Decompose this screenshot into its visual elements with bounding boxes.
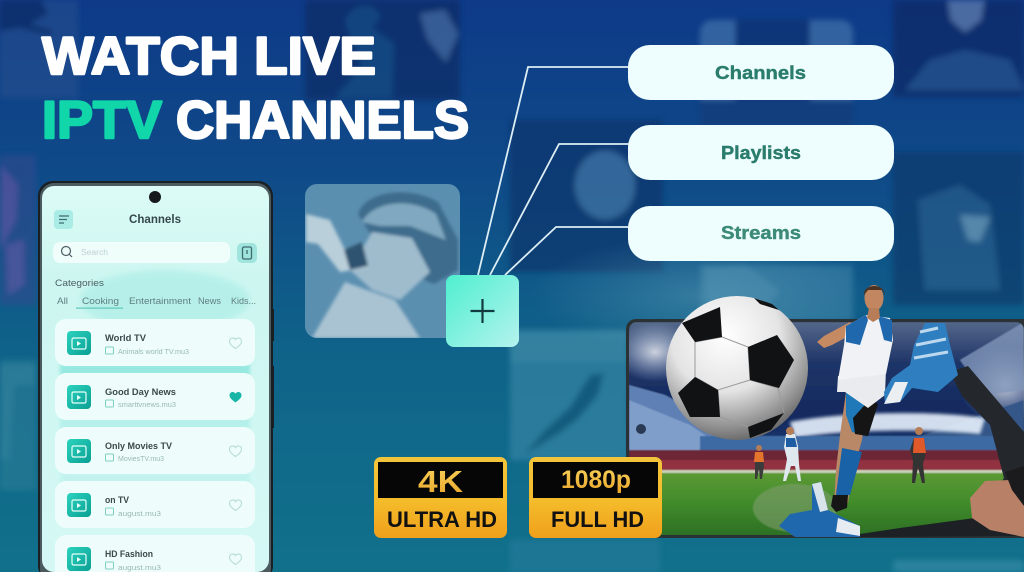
channel card: HD Fashion: august.mu3 (118, 563, 161, 572)
face (970, 480, 1024, 537)
channel card: HD Fashion (55, 535, 255, 572)
channel card: Good Day News (55, 373, 255, 420)
pill: Channels: Channels (715, 63, 806, 83)
screen title: Channels (129, 214, 181, 226)
footballer (817, 285, 893, 512)
channel card: Good Day News: Good Day News (105, 387, 176, 398)
pill: Streams: Streams (721, 223, 801, 243)
title (42, 27, 469, 150)
categories heading: Categories (55, 278, 104, 289)
title line 2: CHANNELS (176, 91, 469, 150)
landscape phone with stadium (613, 319, 1024, 538)
upper glove (884, 323, 958, 404)
category tabs (57, 296, 256, 309)
lower glove (779, 482, 860, 537)
channel card: on TV (55, 481, 255, 528)
category tabs: Entertainment (129, 296, 191, 307)
channel card: World TV (55, 319, 255, 366)
channel card: Only Movies TV: Only Movies TV (105, 441, 173, 452)
ball patches (678, 298, 794, 438)
pill: Playlists (628, 125, 894, 180)
stadium background (613, 322, 1024, 537)
category tabs: News (198, 296, 221, 307)
pill: Channels (628, 45, 894, 100)
badge: 4K Ultra HD: 4K (418, 464, 464, 499)
goalkeeper (779, 323, 1024, 537)
jersey (838, 315, 893, 380)
shorts (837, 368, 886, 408)
head (864, 285, 884, 311)
camera cutout (636, 424, 646, 434)
raised leg (846, 383, 872, 435)
badge: 4K Ultra HD: ULTRA HD (387, 507, 497, 532)
pill: Streams (628, 206, 894, 261)
connector lines (478, 67, 630, 275)
arm (817, 322, 856, 348)
channel card: HD Fashion: HD Fashion (105, 549, 153, 560)
plus button (446, 275, 519, 347)
phone mockup (38, 181, 274, 572)
pill: Playlists: Playlists (721, 143, 801, 163)
category tabs: All (57, 296, 68, 307)
badge: 4K Ultra HD (374, 457, 507, 538)
football (666, 296, 808, 440)
channel card: Only Movies TV: MoviesTV.mu3 (118, 454, 164, 463)
channel card: Only Movies TV (55, 427, 255, 474)
category tabs: Cooking (82, 296, 119, 307)
channel card: on TV: on TV (105, 495, 130, 506)
faded photo tile: hockey player (305, 184, 460, 338)
body and arm (950, 366, 1024, 520)
icon: camera (149, 191, 161, 203)
search bar: Search (81, 248, 108, 257)
channel card: Good Day News: smarttvnews.mu3 (118, 400, 176, 409)
badge: 1080p Full HD: 1080p (561, 466, 631, 494)
supporting leg (834, 392, 868, 503)
icon: menu button (54, 210, 73, 229)
badge: 1080p Full HD: FULL HD (551, 507, 644, 532)
channel card: on TV: august.mu3 (118, 509, 161, 518)
category tabs: Kids... (231, 296, 256, 307)
channel card: World TV: World TV (105, 333, 147, 344)
icon: plus (470, 299, 494, 323)
title line 1: WATCH LIVE (42, 27, 376, 86)
title accent: IPTV: IPTV (42, 91, 162, 150)
search bar (53, 242, 230, 263)
badge: 1080p Full HD (529, 457, 662, 538)
icon: filter button (237, 243, 257, 263)
channel card: World TV: Animals world TV.mu3 (118, 347, 189, 356)
background players (754, 427, 926, 483)
